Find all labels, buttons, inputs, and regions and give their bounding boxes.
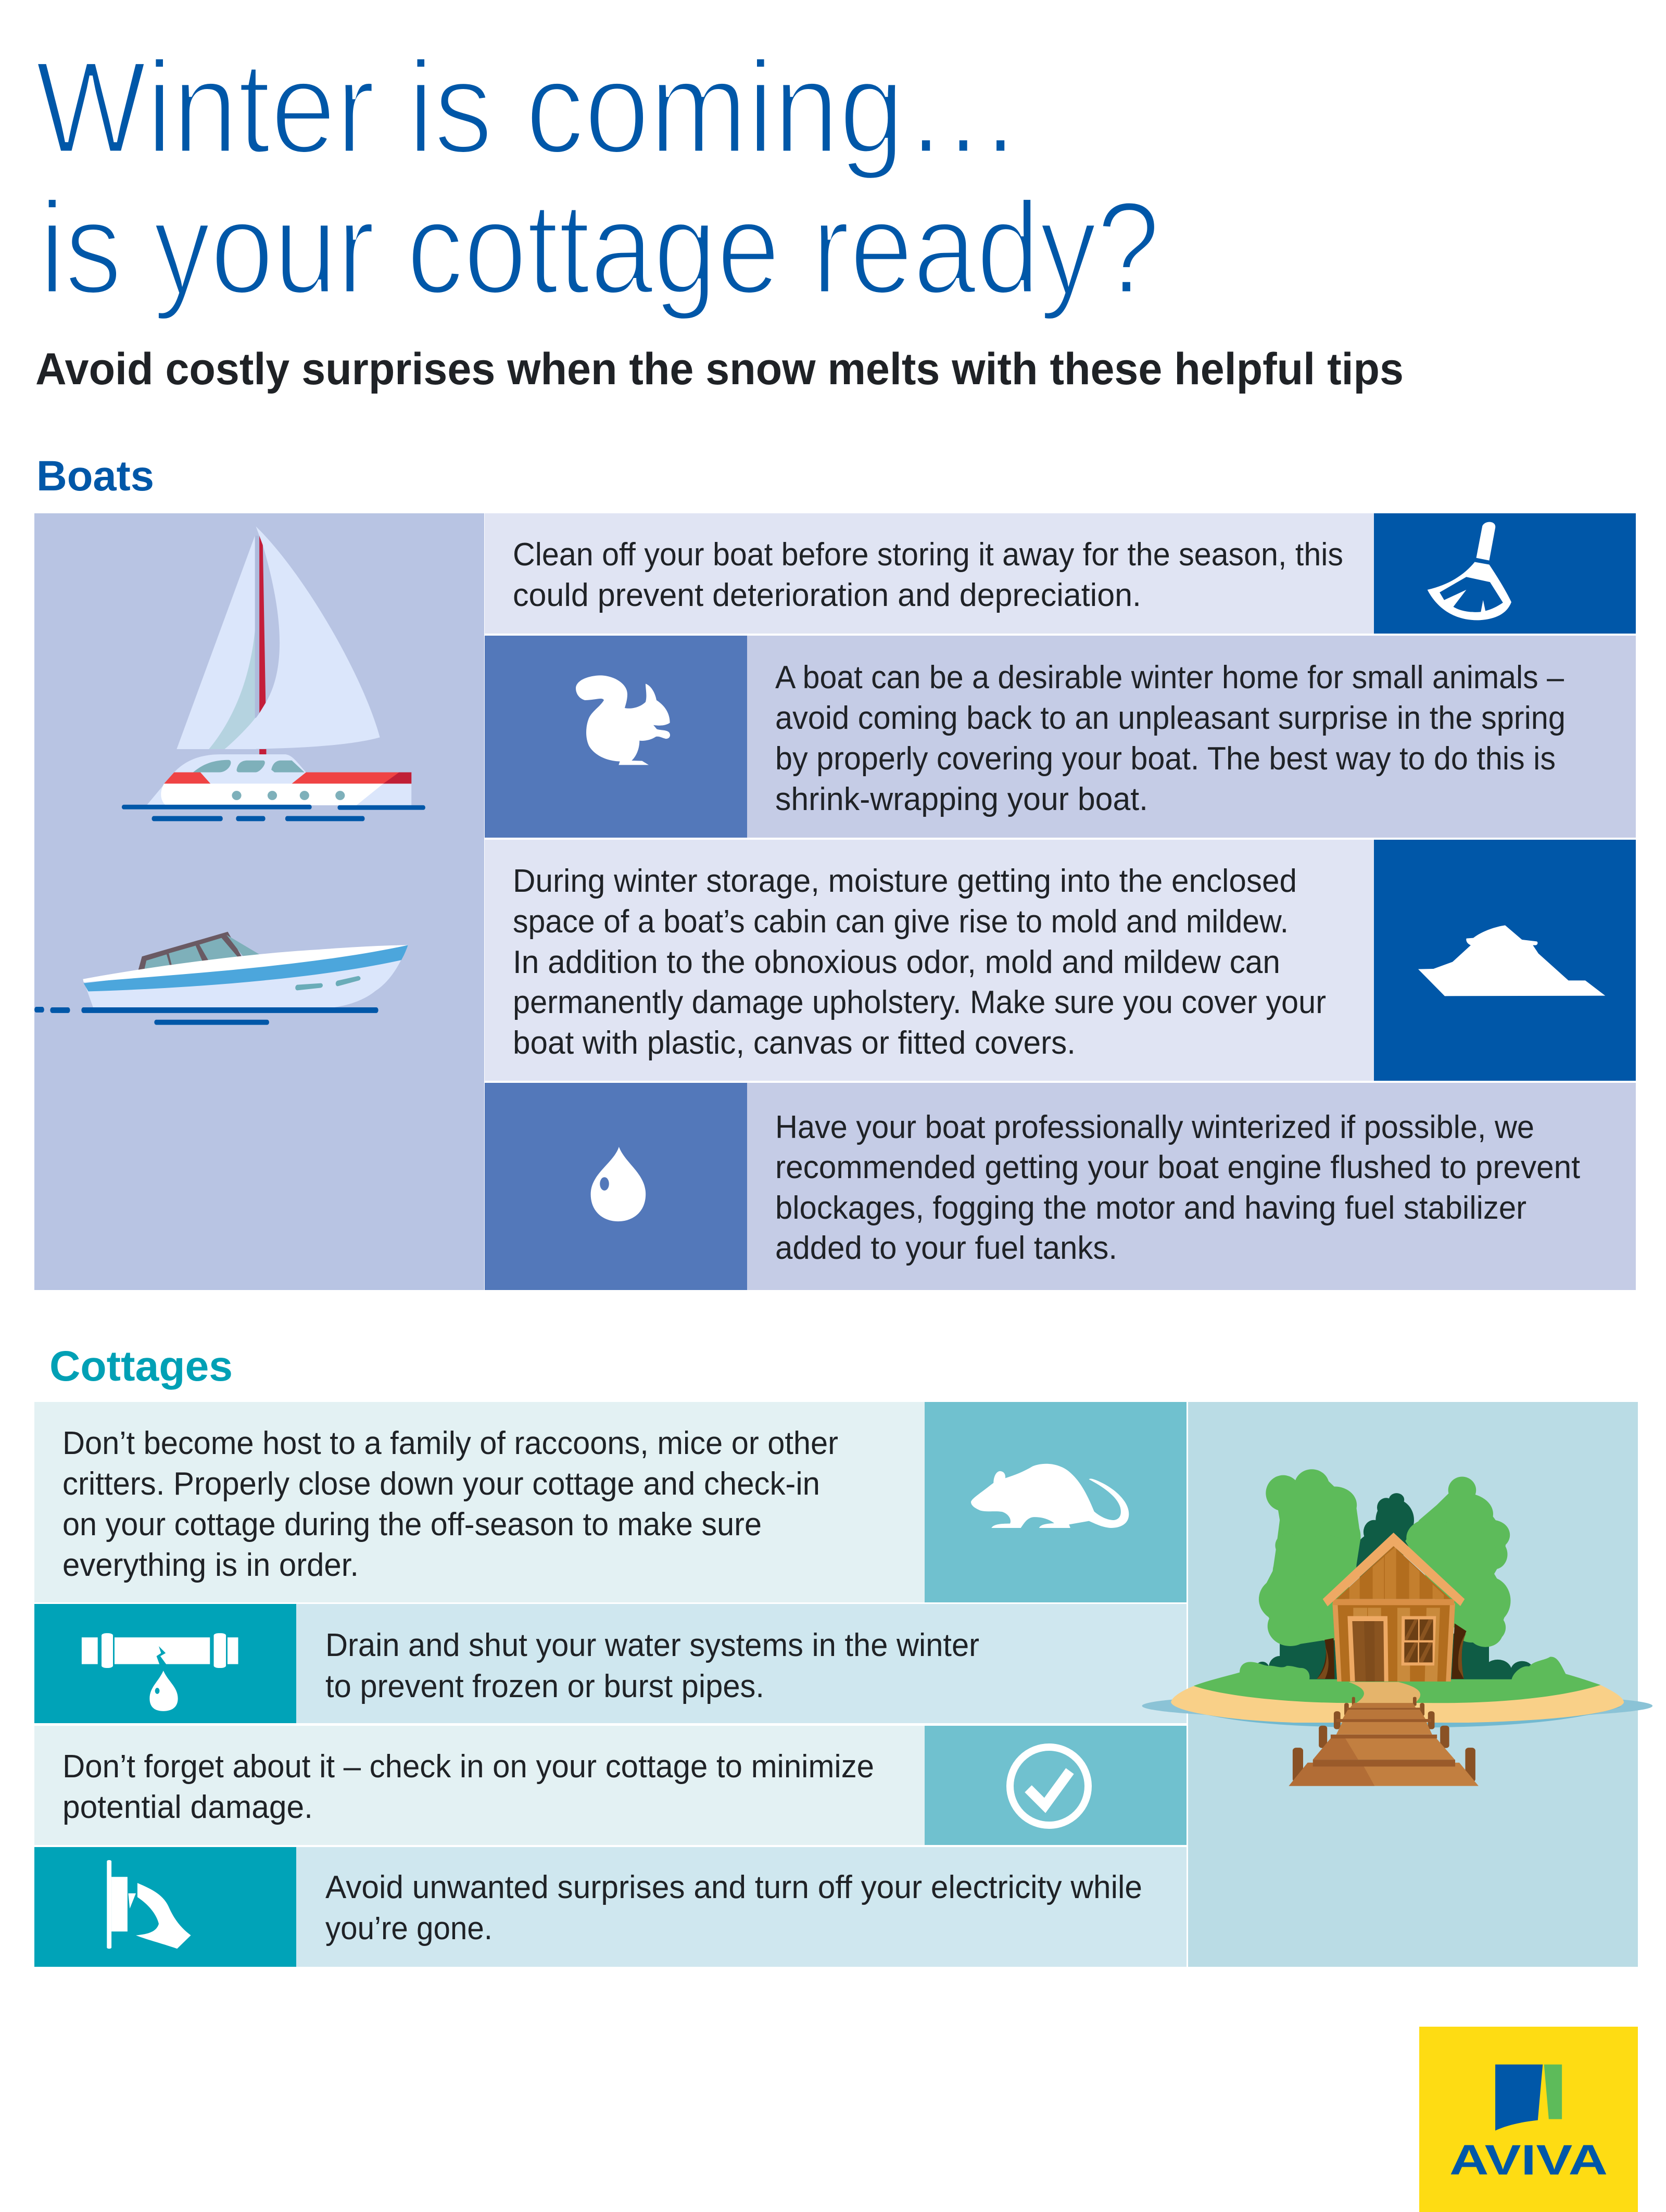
tip row: small animals: A boat can be a desirable winter home for small animals – bbox=[775, 660, 1564, 696]
title: is your cottage ready? bbox=[40, 175, 1160, 321]
tip row: clean off boat: Clean off your boat before storing it away for the season, this bbox=[513, 537, 1343, 573]
icon: squirrel bbox=[485, 636, 747, 838]
footpath bbox=[1348, 1682, 1420, 1703]
tip row: check in bbox=[34, 1726, 1187, 1845]
tip row: water systems bbox=[34, 1604, 1187, 1723]
heading: Boats: Boats bbox=[36, 452, 154, 500]
panel: boats illustration bbox=[34, 513, 484, 1290]
tip row: small animals: by properly covering your boat. The best way to do this is bbox=[775, 741, 1556, 777]
tip row: winterize engine: blockages, fogging the motor and having fuel stabilizer bbox=[775, 1190, 1526, 1226]
subtitle: Avoid costly surprises when the snow melts with these helpful tips bbox=[35, 344, 1404, 394]
icon: check mark bbox=[925, 1726, 1187, 1845]
tip row: critters bbox=[34, 1402, 1187, 1602]
tip row: electricity: Avoid unwanted surprises and turn off your electricity while bbox=[325, 1869, 1142, 1905]
tip row: moisture and mold: During winter storage, moisture getting into the enclosed bbox=[513, 863, 1297, 899]
dock planks bbox=[1289, 1703, 1479, 1786]
tip row: moisture and mold: permanently damage upholstery. Make sure you cover your bbox=[513, 984, 1326, 1020]
tip row: critters: on your cottage during the off-season to make sure bbox=[62, 1507, 762, 1543]
tip row: water systems: Drain and shut your water systems in the winter bbox=[325, 1627, 979, 1663]
icon: broom bbox=[1374, 513, 1636, 634]
tip row: electricity: you’re gone. bbox=[325, 1911, 493, 1946]
panel: cottage illustration background bbox=[1188, 1402, 1638, 1967]
tip row: critters: everything is in order. bbox=[62, 1547, 359, 1583]
illustration: cottage on island with dock bbox=[1142, 1469, 1652, 1786]
tip row: electricity bbox=[34, 1847, 1187, 1967]
tip row: check in: potential damage. bbox=[62, 1789, 313, 1825]
tip row: moisture and mold: boat with plastic, canvas or fitted covers. bbox=[513, 1025, 1076, 1061]
tip row: moisture and mold: space of a boat’s cabin can give rise to mold and mildew. bbox=[513, 904, 1289, 940]
illustration: sailboat bbox=[122, 526, 425, 821]
tip row: small animals: avoid coming back to an unpleasant surprise in the spring bbox=[775, 700, 1566, 736]
background trees bbox=[1255, 1493, 1534, 1682]
tip row: small animals: shrink-wrapping your boat. bbox=[775, 781, 1148, 817]
tip row: moisture and mold: In addition to the obnoxious odor, mold and mildew can bbox=[513, 944, 1280, 980]
tip row: winterize engine: recommended getting your boat engine flushed to prevent bbox=[775, 1149, 1580, 1185]
tip row: critters: Don’t become host to a family of raccoons, mice or other bbox=[62, 1425, 838, 1461]
cabin with trunks bbox=[1317, 1533, 1467, 1682]
icon: water drop bbox=[485, 1083, 747, 1290]
icon: hand and switch bbox=[34, 1847, 296, 1967]
left tree bbox=[1259, 1469, 1361, 1646]
tip row: moisture and mold bbox=[485, 840, 1636, 1081]
water around island bbox=[1142, 1692, 1652, 1728]
heading: Cottages: Cottages bbox=[49, 1343, 233, 1390]
tip row: clean off boat bbox=[485, 513, 1636, 634]
icon: burst pipe bbox=[34, 1604, 296, 1723]
dock posts bbox=[1293, 1697, 1475, 1782]
tip row: check in: Don’t forget about it – check in on your cottage to minimize bbox=[62, 1749, 874, 1785]
icon: covered boat bbox=[1374, 840, 1636, 1081]
tip row: winterize engine bbox=[485, 1083, 1636, 1290]
title: Winter is coming… bbox=[35, 34, 1022, 181]
tip row: water systems: to prevent frozen or burst pipes. bbox=[325, 1669, 764, 1704]
title bbox=[35, 34, 1160, 321]
tip row: winterize engine: Have your boat professionally winterized if possible, we bbox=[775, 1109, 1534, 1145]
logo: Aviva bbox=[1419, 2027, 1638, 2212]
logo: Aviva: AVIVA bbox=[1449, 2137, 1608, 2184]
right tree bbox=[1405, 1477, 1511, 1647]
tip row: clean off boat: could prevent deterioration and depreciation. bbox=[513, 577, 1141, 613]
island sand and grass bbox=[1171, 1657, 1624, 1723]
tip row: winterize engine: added to your fuel tanks. bbox=[775, 1230, 1117, 1266]
icon: rat bbox=[925, 1402, 1187, 1602]
tip row: small animals bbox=[485, 636, 1636, 838]
illustration: motorboat bbox=[34, 932, 408, 1025]
tip row: critters: critters. Properly close down your cottage and check-in bbox=[62, 1466, 820, 1502]
